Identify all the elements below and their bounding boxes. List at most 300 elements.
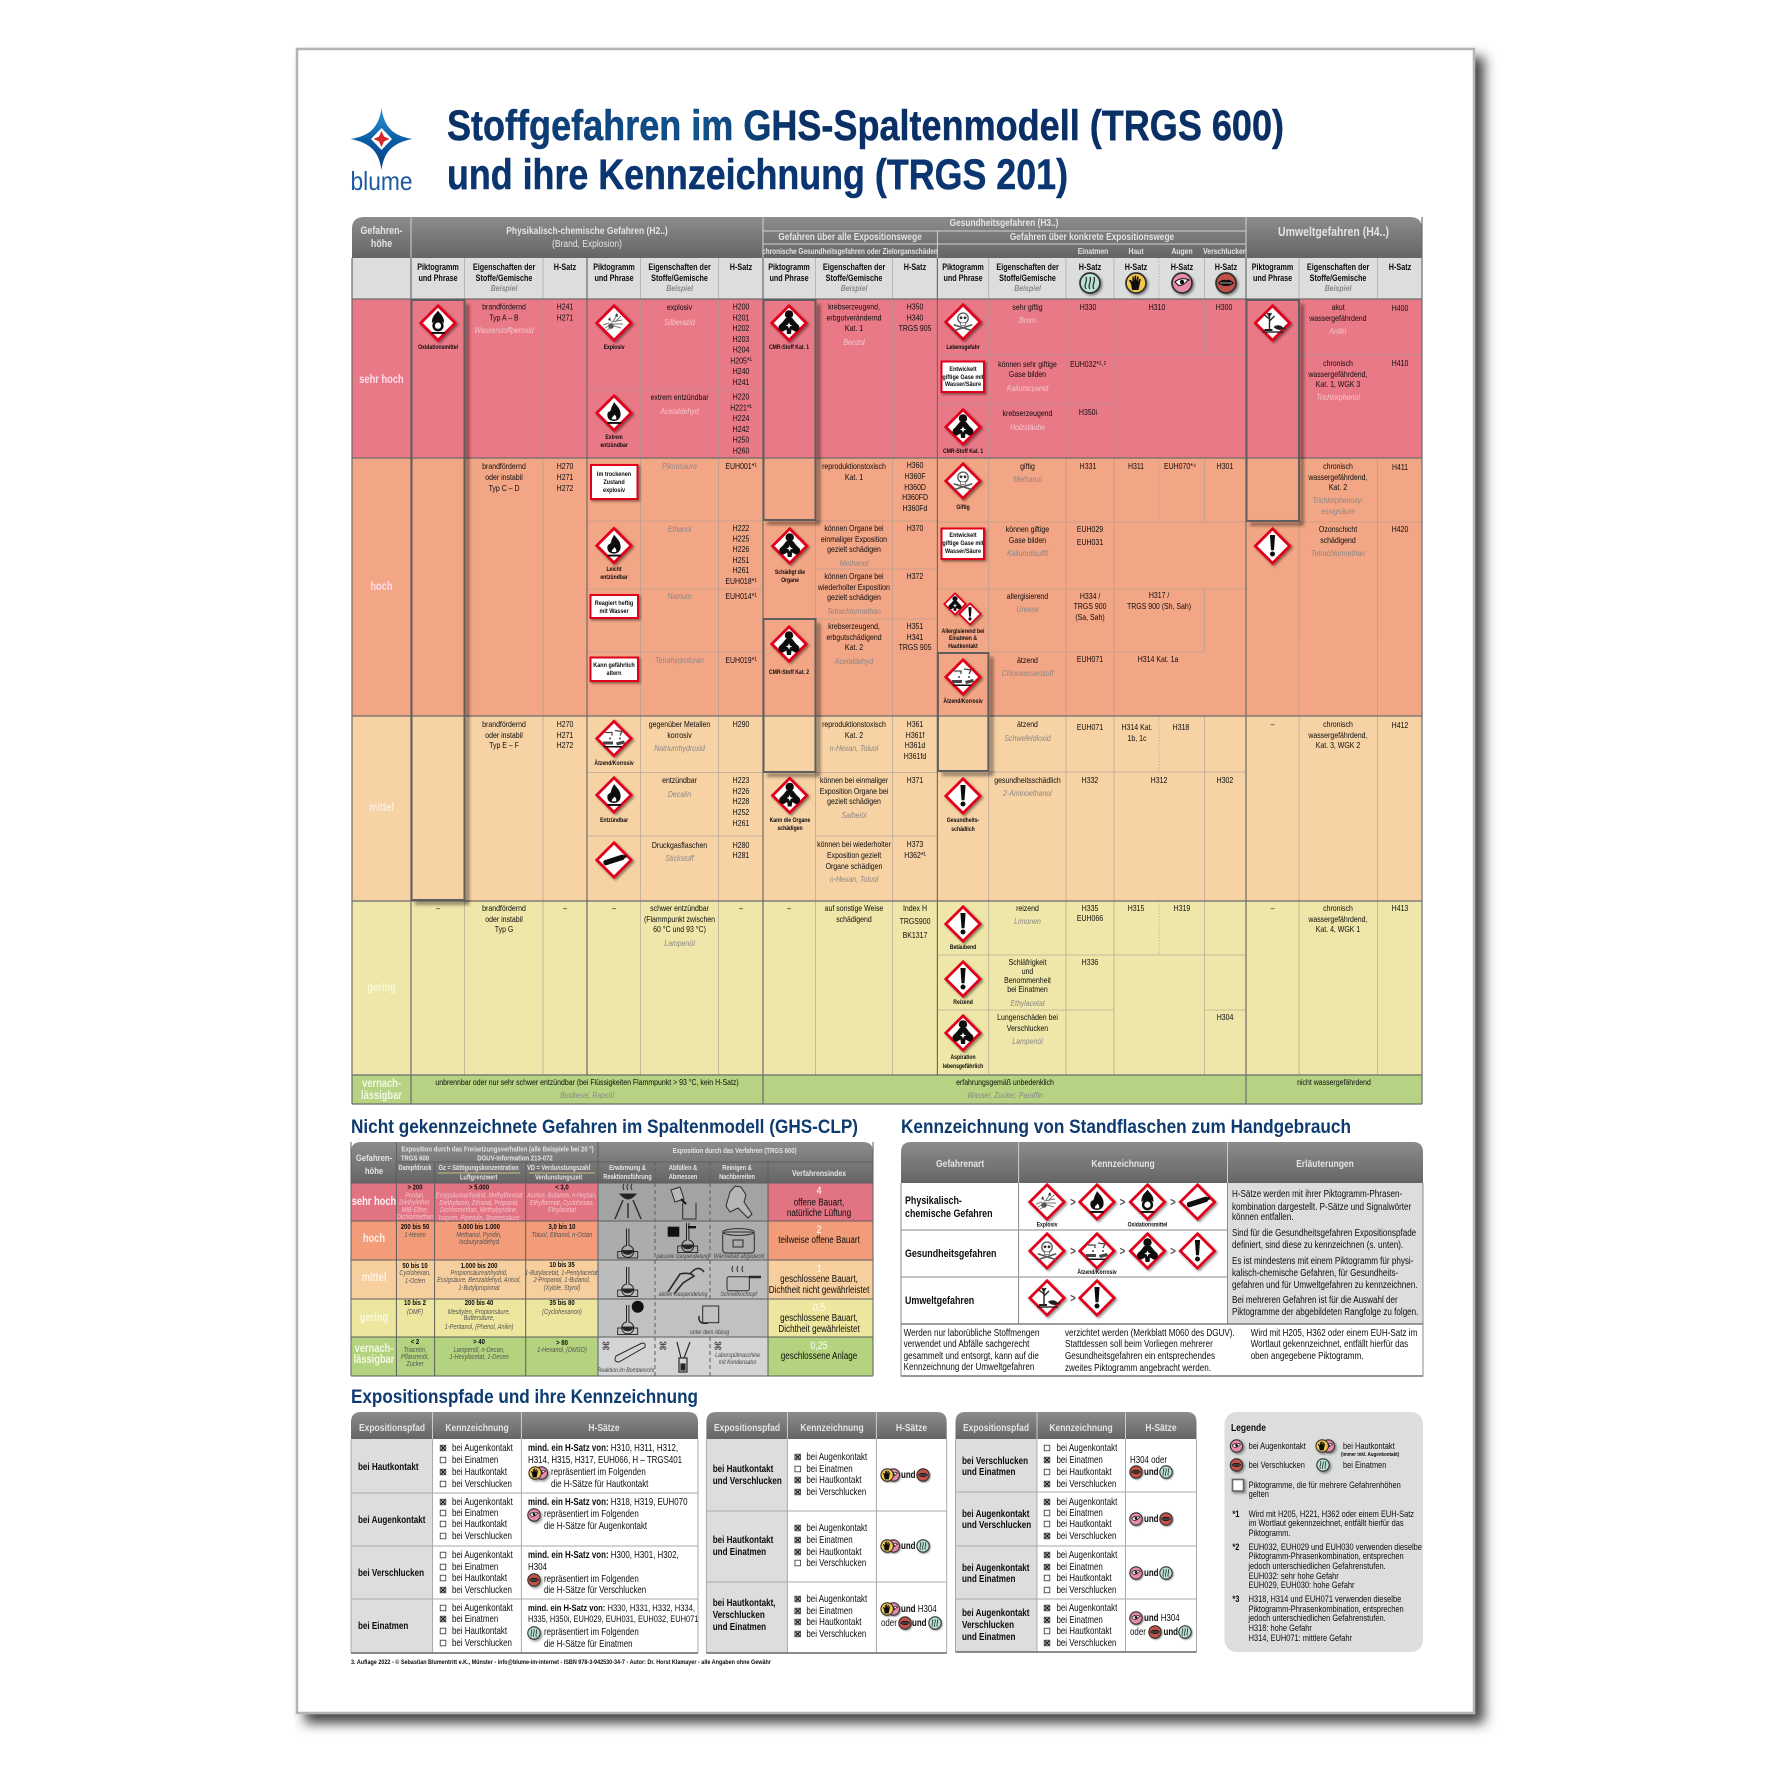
text: health hazards by exposure route: H302 xyxy=(1217,775,1233,785)
text: chronic health hazards: gezielt schädigen xyxy=(827,544,881,554)
footnote text: Stattdessen soll beim Vorliegen mehrerer xyxy=(1065,1338,1213,1349)
text: health hazards by exposure route: Benommenheit xyxy=(1004,975,1052,985)
text: chronic health hazards: krebserzeugend, xyxy=(828,621,880,631)
table header text: Luftgrenzwert xyxy=(460,1174,498,1182)
explanations text xyxy=(1232,1188,1418,1317)
text: physical hazards second block: H225 xyxy=(733,534,750,544)
text: chronic health hazards: Acetaldehyd xyxy=(834,656,874,666)
column: vapour pressure: > 200 xyxy=(407,1184,423,1192)
column: process index: geschlossene Bauart, xyxy=(780,1312,858,1323)
column: evaporation number: < 3,0 xyxy=(555,1184,569,1192)
checkbox lists: bei Einatmen xyxy=(806,1463,853,1474)
level labels: vernach- xyxy=(355,1343,394,1355)
text: environmental hazards: H412 xyxy=(1392,720,1408,730)
text: negligible hazard row: erfahrungsgemäß unbedenklich xyxy=(956,1077,1054,1087)
ranking symbols and captions: > xyxy=(1120,1196,1125,1209)
text: chronic health hazards: H371 xyxy=(907,775,923,785)
phrase box text: altern xyxy=(607,670,622,677)
text: chronic health hazards: – xyxy=(787,903,792,913)
level labels: lässigbar xyxy=(354,1354,394,1366)
text: oxidising gases column: H271 xyxy=(557,313,573,323)
checkbox lists: bei Hautkontakt xyxy=(452,1518,508,1529)
legend notes: *3 xyxy=(1232,1593,1240,1604)
text: negligible hazard row: Biodiesel, Rapsöl xyxy=(560,1090,614,1100)
text: physical hazards second block: Silberazid xyxy=(664,317,695,327)
pictogram phrases: Giftig xyxy=(956,505,970,511)
subheader labels: Piktogramm xyxy=(417,262,459,272)
text: chronic health hazards: TRGS900 xyxy=(900,916,931,926)
column: saturation concentration: Isobutyraldehyd xyxy=(459,1239,499,1246)
column: saturation concentration: Mesitylen, Propionsäure, xyxy=(448,1309,510,1316)
header labels: Haut xyxy=(1129,246,1144,256)
text: health hazards by exposure route: Lungenschäden bei xyxy=(997,1012,1058,1022)
subheader labels: H-Satz xyxy=(1171,262,1193,272)
route labels: bei Hautkontakt xyxy=(713,1534,773,1545)
legend notes: Piktogramm-Phrasenkombination, entsprechen xyxy=(1249,1603,1404,1614)
text: chronic health hazards: können bei wiederholter xyxy=(817,839,891,849)
text: health hazards by exposure route: EUH029 xyxy=(1077,524,1103,534)
header labels: Augen xyxy=(1171,246,1193,256)
checkbox lists: bei Einatmen xyxy=(1056,1507,1103,1518)
column: saturation concentration xyxy=(436,1184,523,1361)
column: saturation concentration: Essigsäure, Benzaldehyd, Anisol, xyxy=(437,1277,521,1284)
text: environmental hazards: – xyxy=(1271,719,1275,729)
column: saturation concentration: Propionsäureanhydrid, xyxy=(451,1270,508,1277)
subheader labels: und Phrase xyxy=(594,273,634,283)
route labels: Verschlucken xyxy=(962,1619,1014,1630)
icon: bulb and block xyxy=(632,1226,696,1313)
text: oxidising gases column: – xyxy=(436,903,441,913)
text: health hazards by exposure route: H310 xyxy=(1149,302,1166,312)
title: und ihre Kennzeichnung (TRGS 201) xyxy=(447,151,1068,199)
text: physical hazards second block: schwer entzündbar xyxy=(650,903,709,913)
column: saturation concentration: 5.000 bis 1.000 xyxy=(458,1224,500,1231)
column: process index: Dichtheit nicht gewährleistet xyxy=(769,1284,870,1295)
text: physical hazards second block: extrem entzündbar xyxy=(651,392,709,402)
subheader labels: Piktogramm xyxy=(768,262,810,272)
footnote text: verzichtet werden (Merkblatt M060 des DGUV). xyxy=(1065,1327,1235,1338)
pictogram phrases: Gesundheits- xyxy=(947,818,979,824)
route icons xyxy=(528,1467,548,1639)
text: chronic health hazards: Kat. 1 xyxy=(845,472,863,482)
checkbox lists: bei Verschlucken xyxy=(806,1557,866,1568)
H-statement notes: repräsentiert im Folgenden xyxy=(544,1626,639,1637)
header labels: chronische Gesundheitsgefahren oder Zielorganschäden xyxy=(762,246,938,256)
text: environmental hazards: Anilin xyxy=(1329,326,1346,336)
route labels: und Einatmen xyxy=(713,1621,766,1632)
text: health hazards by exposure route: ätzend xyxy=(1017,655,1038,665)
column: saturation concentration: Methanol, Pyridin, xyxy=(456,1232,502,1239)
text: physical hazards second block: H281 xyxy=(733,850,749,860)
H-statement notes: repräsentiert im Folgenden xyxy=(551,1466,646,1477)
text: physical hazards second block: gegenüber Metallen xyxy=(649,719,710,729)
checkbox lists: bei Hautkontakt xyxy=(1056,1572,1112,1583)
H-statement notes: H314, H315, H317, EUH066, H – TRGS401 xyxy=(528,1454,682,1465)
pictogram phrases: Lebensgefahr xyxy=(946,345,980,351)
checkbox lists: bei Einatmen xyxy=(452,1507,498,1518)
icon: dispensing nozzle xyxy=(668,1268,704,1294)
text: chronic health hazards: n-Hexan, Toluol xyxy=(830,743,878,753)
text: health hazards by exposure route: EUH031 xyxy=(1077,537,1103,547)
checkbox lists: bei Augenkontakt xyxy=(452,1549,513,1560)
icon: flasks xyxy=(618,1223,698,1334)
text: chronic health hazards: H361fd xyxy=(904,751,926,761)
phrase box text: giftige Gase mit xyxy=(942,374,984,381)
text: health hazards by exposure route: H319 xyxy=(1174,903,1190,913)
pictogram phrases: Organe xyxy=(781,578,799,584)
process icons: lab equipment xyxy=(615,1184,761,1372)
footnote text: Kennzeichnung der Umweltgefahren xyxy=(904,1361,1034,1372)
text: chronic health hazards: H360FD xyxy=(902,492,928,502)
pictogram phrases: Ätzend/Korrosiv xyxy=(943,698,983,705)
column: saturation concentration: 1.000 bis 200 xyxy=(461,1263,498,1270)
checkbox lists: bei Augenkontakt xyxy=(452,1602,513,1613)
legend notes: Wird mit H205, H221, H362 oder einem EUH-Satz xyxy=(1249,1508,1414,1519)
table header text: Erwärmung & xyxy=(609,1165,646,1172)
text: oxidising gases column: H270 xyxy=(557,461,574,471)
checkbox lists: bei Einatmen xyxy=(1056,1614,1103,1625)
text: chronic health hazards: Exposition Organe bei xyxy=(820,786,888,796)
column: evaporation number: 3,0 bis 10 xyxy=(549,1224,576,1231)
route labels: bei Augenkontakt xyxy=(962,1508,1029,1519)
text: environmental hazards: Tetrachlormethan xyxy=(1311,548,1365,558)
icon: glove xyxy=(726,1186,752,1218)
pictogram phrases: entzündbar xyxy=(600,575,628,581)
text: environmental hazards: schädigend xyxy=(1320,535,1356,545)
text: physical hazards second block: H222 xyxy=(733,523,749,533)
text: physical hazards second block: H201 xyxy=(733,313,749,322)
text: health hazards by exposure route: H301 xyxy=(1217,461,1233,471)
subheader labels xyxy=(417,262,1411,293)
text: environmental hazards: chronisch xyxy=(1323,719,1353,729)
text: health hazards by exposure route: EUH071 xyxy=(1077,654,1103,664)
heading: exposure routes: Expositionspfade und ihre Kennzeichnung xyxy=(351,1387,698,1408)
subheader labels: Beispiel xyxy=(1014,283,1042,293)
ranking symbols and captions: > xyxy=(1170,1245,1176,1258)
H-statement notes xyxy=(528,1442,699,1649)
logo: blume xyxy=(350,108,412,196)
text: physical hazards second block: H228 xyxy=(733,796,749,806)
text: physical hazards second block: Decalin xyxy=(668,789,691,799)
subheader labels: H-Satz xyxy=(1215,262,1237,272)
table header text: Verdunstungszeit xyxy=(535,1174,583,1182)
text: environmental hazards: chronisch xyxy=(1323,358,1353,368)
text: environmental hazards: Kat. 1, WGK 3 xyxy=(1316,379,1360,389)
checkbox lists xyxy=(1044,1442,1118,1648)
route labels xyxy=(713,1463,782,1632)
text: health hazards by exposure route: EUH066 xyxy=(1077,913,1103,923)
text: negligible hazard row: Wasser, Zucker, Paraffin xyxy=(967,1090,1043,1100)
pictogram ranking xyxy=(1030,1185,1215,1315)
text: environmental hazards: chronisch xyxy=(1323,461,1353,471)
checkbox lists: bei Verschlucken xyxy=(452,1584,512,1595)
H-statement notes: H304 xyxy=(528,1561,547,1572)
ranking symbols and captions: > xyxy=(1070,1196,1076,1209)
text: physical hazards second block: H204 xyxy=(733,345,750,355)
panel: exposure table 3 xyxy=(956,1412,1196,1652)
footnote text: Werden nur laborübliche Stoffmengen xyxy=(904,1327,1039,1338)
legend notes: jedoch unterschiedlichen Gefahrenstufen. xyxy=(1248,1612,1386,1623)
text: health hazards by exposure route: H336 xyxy=(1082,957,1098,967)
pictogram phrases: Ätzend/Korrosiv xyxy=(594,760,634,767)
checkbox lists: bei Hautkontakt xyxy=(1056,1625,1112,1636)
text: environmental hazards: Trichlorphenoxy- xyxy=(1312,495,1364,505)
text: oxidising gases column: Typ E – F xyxy=(489,740,519,750)
headers xyxy=(359,1422,620,1434)
combined route marks: und xyxy=(901,1540,916,1551)
text: health hazards by exposure route: H304 xyxy=(1217,1012,1234,1022)
text: physical hazards second block: Acetaldehyd xyxy=(659,406,699,416)
headers: Expositionspfad xyxy=(714,1422,780,1434)
icon: sealed tube xyxy=(615,1343,645,1362)
text: environmental hazards: Kat. 3, WGK 2 xyxy=(1316,740,1360,750)
icon: pressure cooker xyxy=(727,1266,761,1291)
legend icon labels: bei Einatmen xyxy=(1343,1459,1387,1470)
combined route marks: und xyxy=(1144,1567,1159,1578)
icon: fume hood xyxy=(699,1306,719,1323)
subheader labels: Eigenschaften der xyxy=(823,262,886,272)
phrase box text: Entwickelt xyxy=(949,532,977,539)
text: oxidising gases column: oder instabil xyxy=(485,472,523,482)
text: chronic health hazards: H360D xyxy=(904,482,926,492)
text: health hazards by exposure route: H315 xyxy=(1128,903,1145,913)
process captions xyxy=(597,1254,765,1374)
text: health hazards by exposure route: Kaliumcyanid xyxy=(1007,383,1049,393)
text: physical hazards second block: H223 xyxy=(733,775,749,785)
text: physical hazards second block: H202 xyxy=(733,323,749,333)
column: vapour pressure: 1-Octen xyxy=(405,1278,426,1285)
text: health hazards by exposure route: reizend xyxy=(1016,903,1039,913)
combined route marks: oder xyxy=(881,1617,897,1628)
pictogram phrases: Hautkontakt xyxy=(948,644,978,650)
text: health hazards by exposure route: H334 / xyxy=(1080,591,1101,601)
combined route marks: und xyxy=(1144,1466,1159,1477)
legend notes: *1 xyxy=(1232,1508,1240,1519)
subheader labels: und Phrase xyxy=(1253,273,1293,283)
H-statement notes: mind. ein H-Satz von: H310, H311, H312, xyxy=(528,1442,678,1453)
phrase box text: explosiv xyxy=(603,487,626,494)
table header text: Abfüllen & xyxy=(669,1165,698,1172)
checkbox lists: bei Einatmen xyxy=(452,1454,498,1465)
text: health hazards by exposure route: H318 xyxy=(1173,722,1189,732)
column: evaporation number: Ethylformiat, Cyclohexan, xyxy=(530,1200,594,1207)
checkbox lists: bei Hautkontakt xyxy=(1056,1518,1112,1529)
header labels: Einatmen xyxy=(1078,246,1109,256)
pictogram phrases: Leicht xyxy=(607,567,622,573)
panel: unmarked hazards table xyxy=(351,1142,873,1376)
text: chronic health hazards: Kat. 1 xyxy=(845,323,863,333)
table header text: höhe xyxy=(365,1165,383,1176)
text: health hazards by exposure route: und xyxy=(1022,966,1033,976)
column: process index: teilweise offene Bauart xyxy=(778,1234,860,1245)
header labels: Gefahren über alle Expositionswege xyxy=(778,231,922,242)
text: health hazards by exposure route: EUH070*⁴ xyxy=(1164,461,1196,471)
route labels: und Einatmen xyxy=(962,1631,1015,1642)
hazard level labels: sehr hoch xyxy=(359,374,404,386)
legend title: Legende xyxy=(1231,1422,1266,1434)
text: health hazards by exposure route: H330 xyxy=(1080,302,1097,312)
table header text: Nachbereiten xyxy=(719,1174,755,1181)
subheader labels: H-Satz xyxy=(730,262,752,272)
text: oxidising gases column: H271 xyxy=(557,730,573,740)
column: vapour pressure: Dichlormethan xyxy=(397,1214,434,1221)
checkbox lists: bei Hautkontakt xyxy=(806,1474,862,1485)
process captions: Reaktion im Bombenrohr xyxy=(597,1368,656,1374)
legend notes: EUH029, EUH030: hohe Gefahr xyxy=(1249,1579,1355,1590)
header labels: Gefahren- xyxy=(360,225,403,237)
phrase boxes: red framed notes xyxy=(590,362,984,681)
text: environmental hazards: H400 xyxy=(1392,303,1409,313)
level labels: mittel xyxy=(362,1272,386,1284)
level row bands xyxy=(351,1183,873,1376)
text: chronic health hazards: erbgutverändernd xyxy=(827,313,881,322)
combined route marks: und H304 xyxy=(901,1603,937,1614)
checkbox lists: bei Verschlucken xyxy=(1056,1637,1116,1648)
text: chronic health hazards: Index H xyxy=(903,903,927,913)
text: physical hazards second block: entzündbar xyxy=(662,775,697,785)
text: physical hazards second block: H205*¹ xyxy=(730,356,752,366)
text: health hazards by exposure route: allergisierend xyxy=(1007,591,1048,601)
explanations text: kalisch-chemische Gefahren, für Gesundheits- xyxy=(1232,1267,1398,1278)
text: health hazards by exposure route: H332 xyxy=(1082,775,1098,785)
legend notes: H314, EUH071: mittlere Gefahr xyxy=(1249,1632,1352,1643)
text: environmental hazards: Kat. 2 xyxy=(1329,482,1347,492)
column: evaporation number: 2-Propanol, 1-Butanol, xyxy=(533,1277,590,1284)
text: chronic health hazards: H372 xyxy=(907,571,923,581)
column: saturation concentration: Lampenöl, n-Decan, xyxy=(454,1347,505,1354)
text: oxidising gases column: H270 xyxy=(557,719,574,729)
ranking symbols and captions: > xyxy=(1170,1196,1176,1209)
panel: exposure table 1 xyxy=(351,1412,699,1653)
text: health hazards by exposure route: gesundheitsschädlich xyxy=(994,775,1061,785)
checkbox lists: bei Hautkontakt xyxy=(806,1616,862,1627)
checkbox lists: bei Hautkontakt xyxy=(452,1466,508,1477)
text: chronic health hazards: auf sonstige Weise xyxy=(825,903,883,913)
H-statement notes: repräsentiert im Folgenden xyxy=(544,1573,639,1584)
text: environmental hazards: H411 xyxy=(1392,462,1408,472)
text: physical hazards second block: Natriumhydroxid xyxy=(654,743,705,753)
checkbox lists: bei Augenkontakt xyxy=(806,1593,868,1604)
level labels: hoch xyxy=(363,1233,385,1245)
route labels: und Verschlucken xyxy=(713,1475,782,1486)
checkbox lists: bei Augenkontakt xyxy=(452,1496,513,1507)
column: evaporation number: 10 bis 35 xyxy=(549,1262,575,1269)
headers xyxy=(963,1422,1177,1434)
text: health hazards by exposure route: H314 Kat. xyxy=(1122,722,1152,732)
header labels xyxy=(360,217,1389,256)
text: health hazards by exposure route: TRGS 900 (Sh, Sah) xyxy=(1127,601,1191,611)
subheader labels: Eigenschaften der xyxy=(1307,262,1370,272)
pictogram phrases: Einatmen & xyxy=(949,636,977,642)
phrase box text: Reagiert heftig xyxy=(595,600,633,607)
checkbox lists: bei Hautkontakt xyxy=(452,1625,508,1636)
text: health hazards by exposure route: EUH071 xyxy=(1077,722,1103,732)
text: chronic health hazards: BK1317 xyxy=(903,930,927,940)
text: physical hazards second block: EUH019*¹ xyxy=(725,655,757,665)
column: vapour pressure: Cyclohexan, xyxy=(399,1270,431,1277)
closed-system marker glyphs: ⌘ xyxy=(659,1341,667,1353)
legend notes: H318, H314 und EUH071 verwenden dieselbe xyxy=(1249,1593,1402,1604)
subheader labels: Stoffe/Gemische xyxy=(476,273,533,283)
column: vapour pressure: (DMF) xyxy=(407,1309,423,1316)
checkbox lists: bei Einatmen xyxy=(452,1613,498,1624)
text: oxidising gases column: brandfördernd xyxy=(482,719,526,729)
text: environmental hazards: akut xyxy=(1332,302,1345,312)
legend notes xyxy=(1232,1479,1422,1643)
header labels: Gefahren über konkrete Expositionswege xyxy=(1010,231,1174,242)
H-statement notes: die H-Sätze für Augenkontakt xyxy=(544,1520,648,1531)
checkbox lists: bei Verschlucken xyxy=(1056,1530,1116,1541)
explanations text: kombination dargestellt. P-Sätze und Signalwörter xyxy=(1232,1201,1411,1212)
headers: Kennzeichnung xyxy=(800,1422,864,1434)
route labels: bei Einatmen xyxy=(358,1620,408,1631)
text: chronic health hazards: H373 xyxy=(907,839,923,849)
text: chronic health hazards: H361d xyxy=(905,740,925,750)
text: chronic health hazards: schädigend xyxy=(836,914,872,924)
footnote text: zweites Piktogramm angebracht werden. xyxy=(1065,1362,1211,1373)
text: health hazards by exposure route: H335 xyxy=(1082,903,1099,913)
checkbox lists: bei Einatmen xyxy=(452,1561,498,1572)
footnote text: Wird mit H205, H362 oder einem EUH-Satz im xyxy=(1251,1327,1417,1338)
combined route marks: und xyxy=(901,1469,916,1480)
text: physical hazards second block: Pikrinsäure xyxy=(662,461,698,471)
text: health hazards by exposure route: sehr giftig xyxy=(1012,302,1043,312)
frames: pictograms valid for several hazard levels xyxy=(412,300,1302,903)
text: environmental hazards: H413 xyxy=(1392,903,1408,913)
text: health hazards by exposure route: H331 xyxy=(1080,461,1096,471)
footnote text: Wortlaut gekennzeichnet, entfällt hierfür das xyxy=(1251,1338,1409,1349)
process captions: Schnellkochtopf xyxy=(720,1292,758,1298)
icon: tripod burner xyxy=(615,1184,641,1219)
checkbox lists: bei Verschlucken xyxy=(806,1486,866,1497)
pictogram phrases: schädigen xyxy=(777,826,803,832)
subheader labels: Stoffe/Gemische xyxy=(999,273,1056,283)
text: health hazards by exposure route: Verschlucken xyxy=(1007,1023,1048,1033)
combined route marks: oder xyxy=(1130,1626,1146,1637)
checkbox lists: bei Hautkontakt xyxy=(806,1546,862,1557)
table header text: Verfahrensindex xyxy=(792,1168,847,1178)
pictogram phrases: CMR-Stoff Kat. 1 xyxy=(943,449,984,455)
phrase box text: Entwickelt xyxy=(949,366,977,373)
combined route marks xyxy=(1130,1454,1191,1638)
text: chronic health hazards: n-Hexan, Toluol xyxy=(830,874,878,884)
hazard level labels: lässigbar xyxy=(361,1090,402,1102)
phrase box text: Wasser/Säure xyxy=(945,548,982,555)
text: chronic health hazards: gezielt schädigen xyxy=(827,592,881,602)
text: environmental hazards: H410 xyxy=(1392,358,1409,368)
text: environmental hazards: chronisch xyxy=(1323,903,1353,913)
header labels: Gesundheitsgefahren (H3..) xyxy=(950,217,1058,228)
legend notes: *2 xyxy=(1232,1541,1240,1552)
imprint: 3. Auflage 2022 - © Sebastian Blumentritt e.K., Münster - info@blume-im-internet - ISBN 978-3-942530-34-7 - Autor: Dr. Horst Klamayer - alle Angaben ohne Gewähr xyxy=(351,1658,771,1666)
text: chronic health hazards xyxy=(787,302,932,940)
table header text: Abmessen xyxy=(669,1174,697,1181)
legend icon labels xyxy=(1249,1440,1399,1470)
ranking symbols and captions: > xyxy=(1070,1245,1076,1258)
text: health hazards by exposure route: H350i xyxy=(1079,407,1097,417)
header labels: Kennzeichnung xyxy=(1091,1158,1155,1170)
subheader labels: H-Satz xyxy=(1079,262,1101,272)
pictograms: GHS hazard diamonds in main table xyxy=(421,305,1290,1050)
text: chronic health hazards: TRGS 905 xyxy=(899,323,932,333)
subheader labels: Beispiel xyxy=(1325,283,1352,293)
column: evaporation number: Aceton, Butanon, n-Heptan, xyxy=(526,1192,597,1200)
checkbox lists: bei Einatmen xyxy=(1056,1454,1103,1465)
text: environmental hazards: wassergefährdend, xyxy=(1307,730,1367,740)
header labels: höhe xyxy=(371,238,393,250)
text: health hazards by exposure route: können giftige xyxy=(1006,524,1049,534)
headers: Expositionspfad xyxy=(359,1422,425,1434)
